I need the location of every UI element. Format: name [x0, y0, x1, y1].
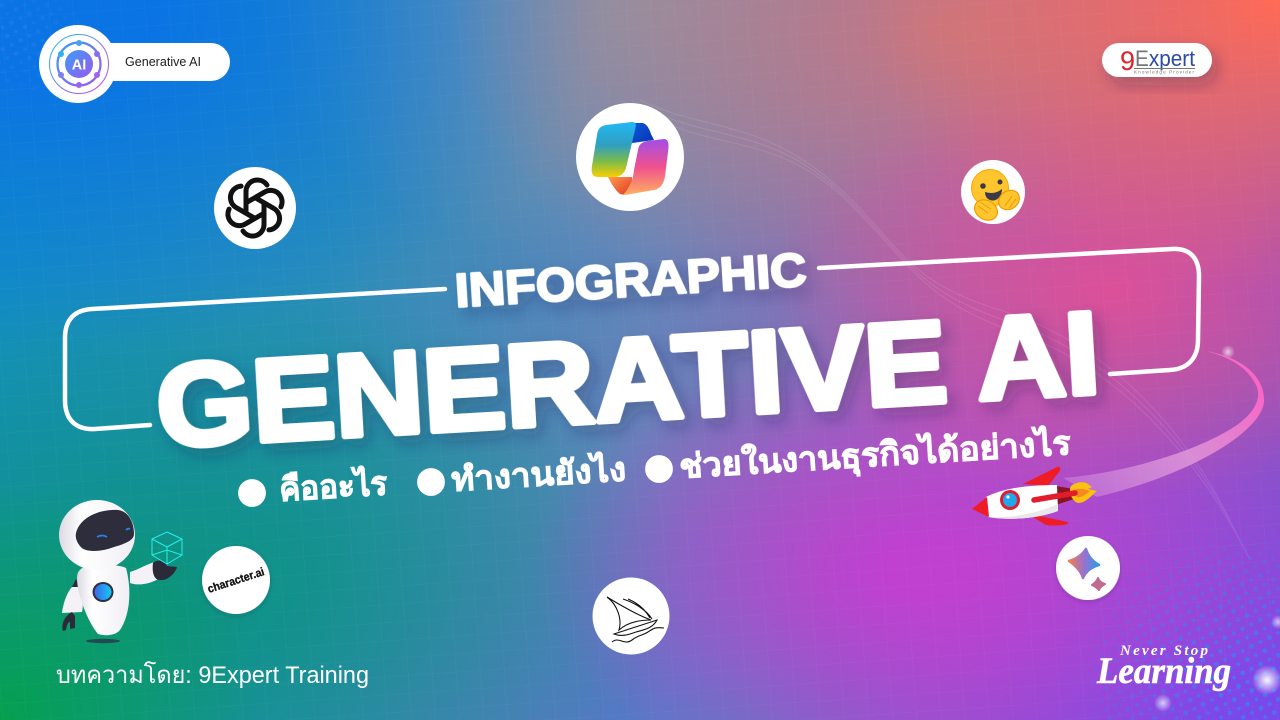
subtopic 1: คืออะไร — [278, 463, 388, 508]
slogan: Never Stop Learning: Never Stop — [1119, 643, 1208, 659]
robot left arm — [62, 579, 83, 631]
robot shadow — [86, 639, 120, 643]
icon: character.ai — [202, 546, 270, 614]
slogan: Never Stop Learning: Learning — [1096, 651, 1231, 692]
icon: character.ai: character.ai — [206, 566, 266, 596]
icon: Copilot — [576, 103, 684, 211]
icon: AI circuit ring: AI — [72, 58, 86, 74]
title frame — [65, 249, 1199, 429]
subtopic 1 — [238, 463, 388, 508]
subtopic 2: ทำงานยังไง — [450, 449, 627, 498]
robot visor — [76, 510, 134, 551]
badge label: Generative AI — [125, 55, 201, 69]
robot body — [77, 565, 129, 635]
rocket trail — [1063, 351, 1264, 497]
icon: holographic cube — [152, 532, 182, 564]
logo: 9Expert pill: 9 — [1120, 46, 1135, 76]
heading: GENERATIVE AI: GENERATIVE AI — [153, 287, 1103, 472]
credit line: บทความโดย: 9Expert Training — [56, 661, 369, 689]
logo: 9Expert pill: Expert — [1135, 46, 1195, 71]
logo: 9Expert pill — [1102, 43, 1212, 77]
robot head — [59, 500, 135, 570]
icon: OpenAI knot — [214, 167, 296, 249]
icon: Hugging Face — [961, 160, 1025, 224]
robot right arm and hand — [130, 561, 177, 584]
icon: Gemini sparkle — [1056, 536, 1120, 600]
icon: Midjourney — [592, 578, 670, 654]
icon: AI circuit ring — [50, 34, 108, 94]
logo badge: Generative AI — [39, 25, 230, 103]
logo: 9Expert pill: Knowledge Provider — [1134, 70, 1194, 74]
heading: INFOGRAPHIC: INFOGRAPHIC — [453, 243, 808, 317]
icon: rocket — [972, 467, 1097, 526]
robot illustration — [59, 500, 182, 643]
robot core light — [92, 582, 114, 602]
subtopic bullets — [238, 423, 1072, 508]
subtopic 3: ช่วยในงานธุรกิจได้อย่างไร — [678, 423, 1072, 488]
